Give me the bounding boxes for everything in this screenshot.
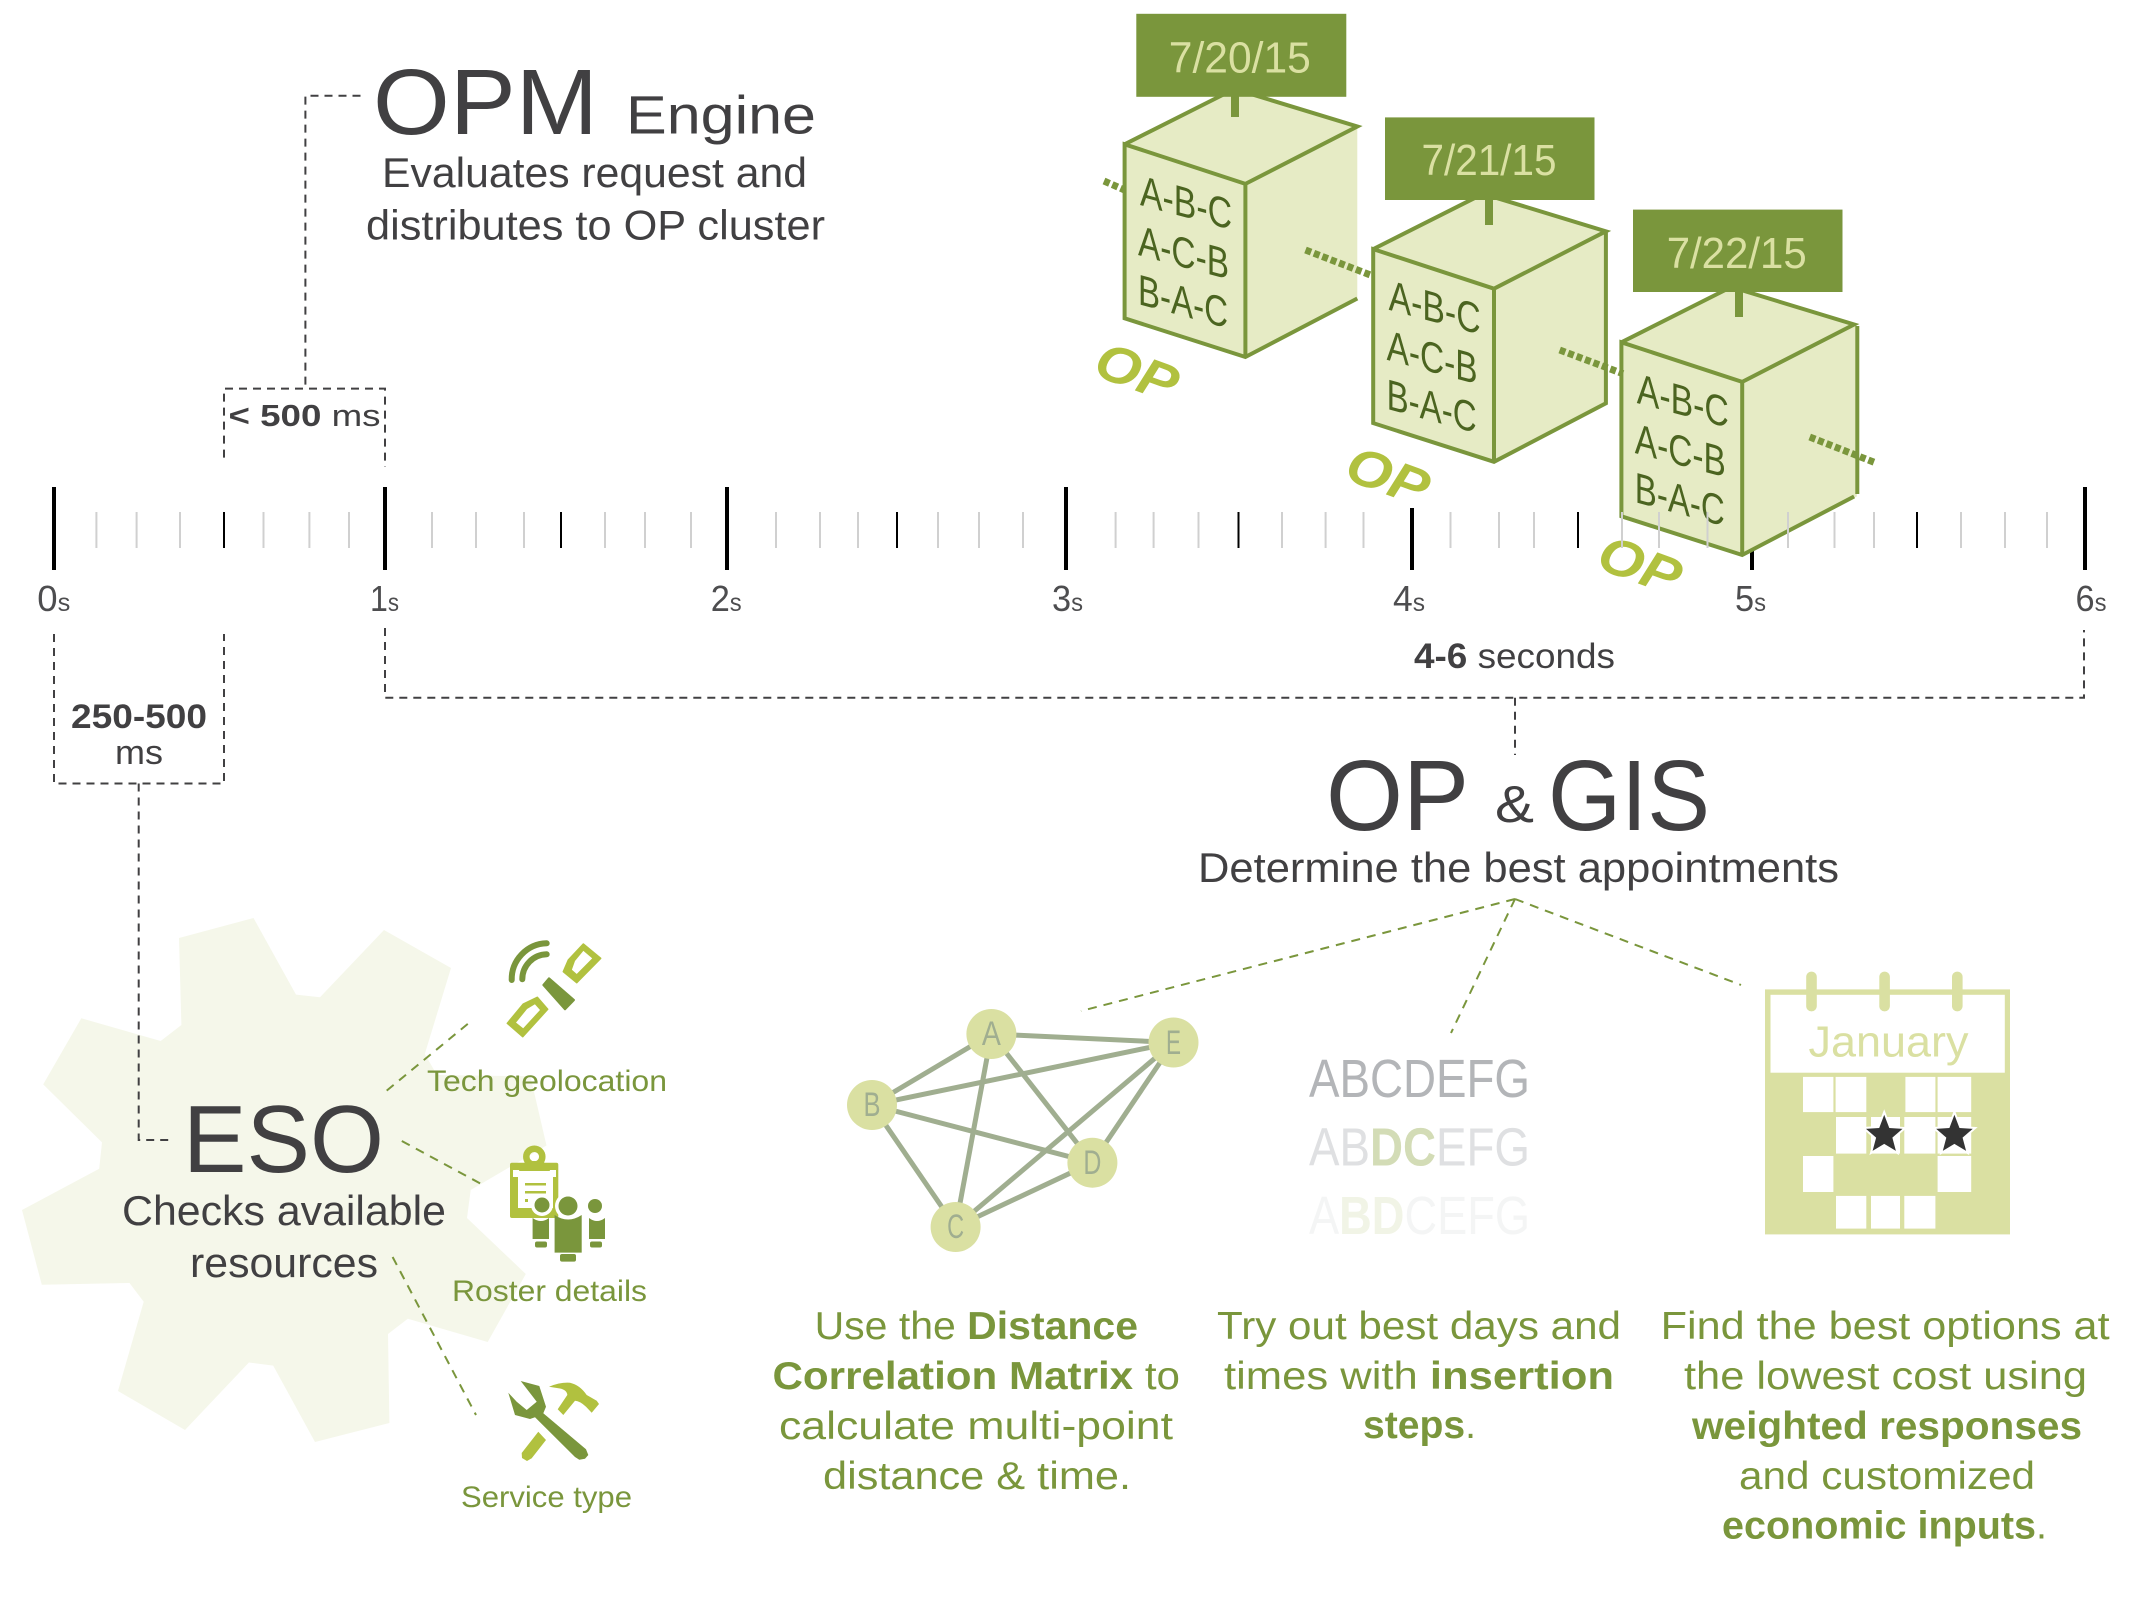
chart: distance network graph: A [982,1015,1001,1053]
timeline: second labels: 2s [711,578,742,619]
heading: OP and GIS: & [1495,776,1534,834]
heading: OP and GIS: OP [1326,740,1469,852]
heading: OPM Engine: Engine [626,85,816,145]
chart: distance network graph: D [1083,1144,1101,1182]
label: Roster details: Roster details [452,1275,647,1308]
text: weighted responses: the lowest cost using [1684,1355,2087,1398]
connector lines: ESO to resources [387,1020,485,1415]
chart: distance network graph: C [947,1208,964,1246]
text: distance correlation matrix: Use the Distance [815,1305,1138,1348]
date tag: 7/20/15 [1136,14,1346,117]
chart: distance network graph: E [1166,1024,1181,1062]
cube: 7/22/15: B-A-C [1635,464,1725,536]
duration label: 250-500 ms [71,698,207,772]
timeline: second labels: 4s [1393,578,1425,619]
bracket: OP and GIS 4-6 seconds [385,628,2084,755]
cube: 7/22/15: A-B-C [1637,365,1729,438]
label: Service type: Service type [461,1481,632,1514]
cube: 7/21/15 [1373,194,1606,462]
cube: 7/21/15: A-C-B [1387,321,1478,394]
OP label: second cube: OP [1338,435,1437,519]
connector lines: GIS to methods [1081,899,1741,1033]
panel: OP cube stack [1087,14,1875,608]
timeline: second labels: 1s [370,578,399,619]
connector: out of third cube [1810,437,1875,463]
timeline tick: 5s hidden behind cube [1750,487,1754,570]
chart: insertion steps letter rows [1309,1049,1530,1246]
heading: OP and GIS [1198,740,1839,891]
text: distance correlation matrix: distance & time. [823,1455,1131,1498]
panel: ESO gear background [22,918,546,1442]
text: OPM description [366,149,825,248]
date tag: 7/22/15 [1633,210,1842,317]
label: Tech geolocation: Tech geolocation [427,1065,667,1098]
date tag: 7/21/15 [1385,117,1594,225]
connector: second to third cube [1560,350,1623,374]
timeline: second labels: 5s [1735,578,1766,619]
text: weighted responses [1661,1305,2110,1548]
text: distance correlation matrix: calculate multi-point [779,1405,1173,1448]
text: weighted responses: Find the best options at [1661,1305,2110,1348]
OP label: first cube: OP [1087,331,1186,415]
text: OPM description: distributes to OP cluster [366,202,825,248]
heading: ESO: ESO [183,1086,384,1193]
heading: OPM Engine: OPM [373,50,598,154]
duration label: under 500 ms: < 500 ms [228,398,380,433]
text: insertion steps: times with insertion [1224,1355,1614,1398]
bracket: OPM under 500 ms [224,96,385,467]
text: distance correlation matrix: Correlation Matrix to [772,1355,1180,1398]
text: insertion steps: steps. [1363,1404,1476,1447]
heading: OP and GIS: GIS [1548,740,1710,852]
date tag: 7/20/15: 7/20/15 [1169,33,1311,82]
cube: 7/22/15 [1621,287,1857,555]
cube: 7/20/15: A-C-B [1138,217,1229,289]
timeline: second labels: 6s [2076,578,2106,619]
connector: first to second cube [1306,250,1373,276]
text: weighted responses: weighted responses [1691,1405,2082,1448]
text: OPM description: Evaluates request and [382,149,807,196]
icon: roster clipboard and people [510,1149,606,1262]
text: OP and GIS description: Determine the best appointments [1198,844,1839,891]
text: ESO description [122,1187,446,1286]
chart: insertion steps letter rows: ABDCEFG [1309,1186,1530,1246]
text: ESO description: Checks available [122,1187,446,1234]
cube: 7/21/15: A-B-C [1389,271,1481,344]
text: distance correlation matrix [772,1305,1180,1498]
cube: 7/20/15: B-A-C [1138,266,1228,338]
timeline: second labels: 3s [1052,578,1083,619]
chart: distance network graph [847,1009,1198,1252]
icon: January calendar [1765,972,2010,1234]
duration label: 250-500 ms: ms [115,734,163,772]
chart: insertion steps letter rows: ABCDEFG [1309,1049,1530,1109]
icon: wrench and hammer [508,1381,599,1461]
cube: 7/20/15: A-B-C [1140,167,1232,240]
cube: 7/21/15: B-A-C [1387,370,1477,443]
text: weighted responses: and customized [1739,1455,2035,1498]
icon: January calendar: January [1808,1018,1968,1066]
connector: into first cube [1104,181,1125,190]
chart: distance network graph: B [864,1086,880,1124]
cube: 7/20/15 [1125,89,1357,357]
timeline: second labels [37,578,2106,619]
text: insertion steps [1217,1305,1621,1447]
cube: 7/22/15: A-C-B [1635,415,1726,487]
text: insertion steps: Try out best days and [1217,1305,1621,1348]
text: ESO description: resources [190,1239,378,1286]
text: weighted responses: economic inputs. [1722,1505,2047,1548]
date tag: 7/21/15: 7/21/15 [1422,136,1556,185]
duration label: 4-6 seconds: 4-6 seconds [1414,637,1615,676]
heading: ESO [122,1086,446,1286]
icon: satellite [507,943,601,1037]
heading: OPM Engine [366,50,825,248]
chart: insertion steps letter rows: ABDCEFG [1309,1118,1530,1178]
duration label: 250-500 ms: 250-500 [71,698,207,736]
timeline: second labels: 0s [37,578,70,619]
bracket: ESO 250-500 ms [54,634,224,1140]
OP label: third cube: OP [1590,524,1689,608]
date tag: 7/22/15: 7/22/15 [1667,229,1807,278]
timeline: tick marks [54,487,2085,570]
